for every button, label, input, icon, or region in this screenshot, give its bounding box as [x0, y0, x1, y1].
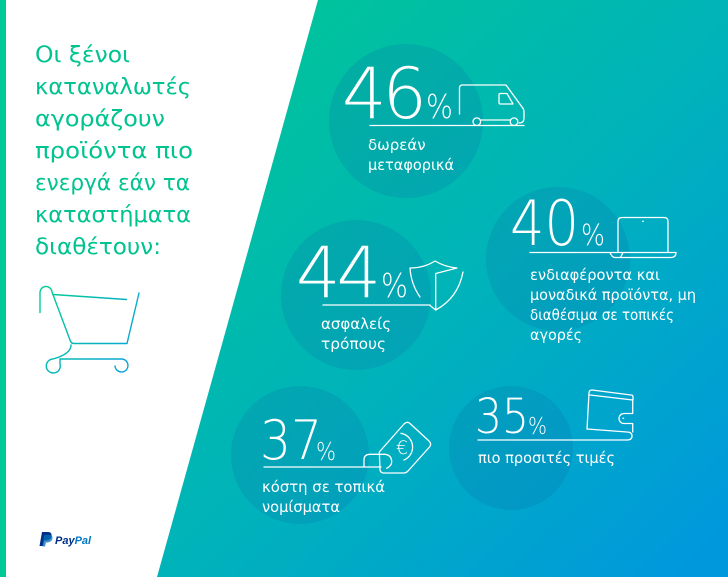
stat: 40% unique products [486, 187, 696, 344]
label: πιο προσιτές τιμές [478, 449, 615, 467]
icon: shopping cart [40, 286, 139, 373]
label: ενδιαφέροντα και [530, 266, 660, 284]
icon: price tag with euro [364, 422, 431, 473]
stat: 37% local currency: νομίσματα [262, 498, 340, 516]
stat: 46% free shipping: 46 [342, 53, 423, 135]
icon: laptop [610, 218, 676, 258]
stat: 44% secure payments: % [381, 266, 408, 305]
logo: PayPal: PayPal [55, 535, 92, 547]
stat: 35% affordable prices: 35 [475, 389, 529, 445]
stat: 40% unique products: % [581, 218, 605, 252]
title: ενεργά εάν τα [35, 170, 190, 196]
stat: 37% local currency: 37 [260, 409, 322, 472]
title: διαθέτουν: [35, 234, 161, 260]
icon: price tag with euro: € [396, 437, 408, 459]
stat: 46% free shipping: μεταφορικά [368, 156, 454, 174]
gradient background panel [157, 0, 728, 577]
stat: 40% unique products: 40 [510, 187, 579, 260]
stat: 37% local currency [231, 386, 431, 524]
stat: 46% free shipping [329, 44, 524, 198]
stat: 44% secure payments: 44 [296, 232, 377, 314]
title: προϊόντα πιο [35, 138, 193, 164]
label: ασφαλείς [321, 315, 391, 333]
stat: 35% affordable prices [449, 386, 633, 510]
stat: 44% secure payments: τρόπους [321, 335, 386, 353]
stat: 46% free shipping: % [426, 87, 453, 126]
icon: delivery truck [460, 85, 524, 125]
title: Οι ξένοι [35, 42, 130, 68]
stat: 37% local currency: % [316, 437, 336, 466]
label: δωρεάν [368, 136, 426, 154]
title: καταναλωτές [35, 74, 191, 100]
stat: 44% secure payments [281, 220, 463, 370]
stat: 35% affordable prices: % [528, 414, 547, 440]
title: καταστήματα [35, 202, 191, 228]
logo: PayPal [40, 532, 92, 547]
icon: shield [410, 261, 463, 310]
stat: 40% unique products: μοναδικά προϊόντα, μη [530, 286, 696, 304]
green left bar [0, 0, 6, 577]
icon: wallet [587, 390, 633, 432]
label: κόστη σε τοπικά [262, 478, 385, 496]
title [35, 42, 193, 260]
stat: 40% unique products: διαθέσιμα σε τοπικές [530, 306, 674, 324]
stat: 40% unique products: αγορές [530, 326, 582, 344]
title: αγοράζουν [35, 106, 165, 132]
